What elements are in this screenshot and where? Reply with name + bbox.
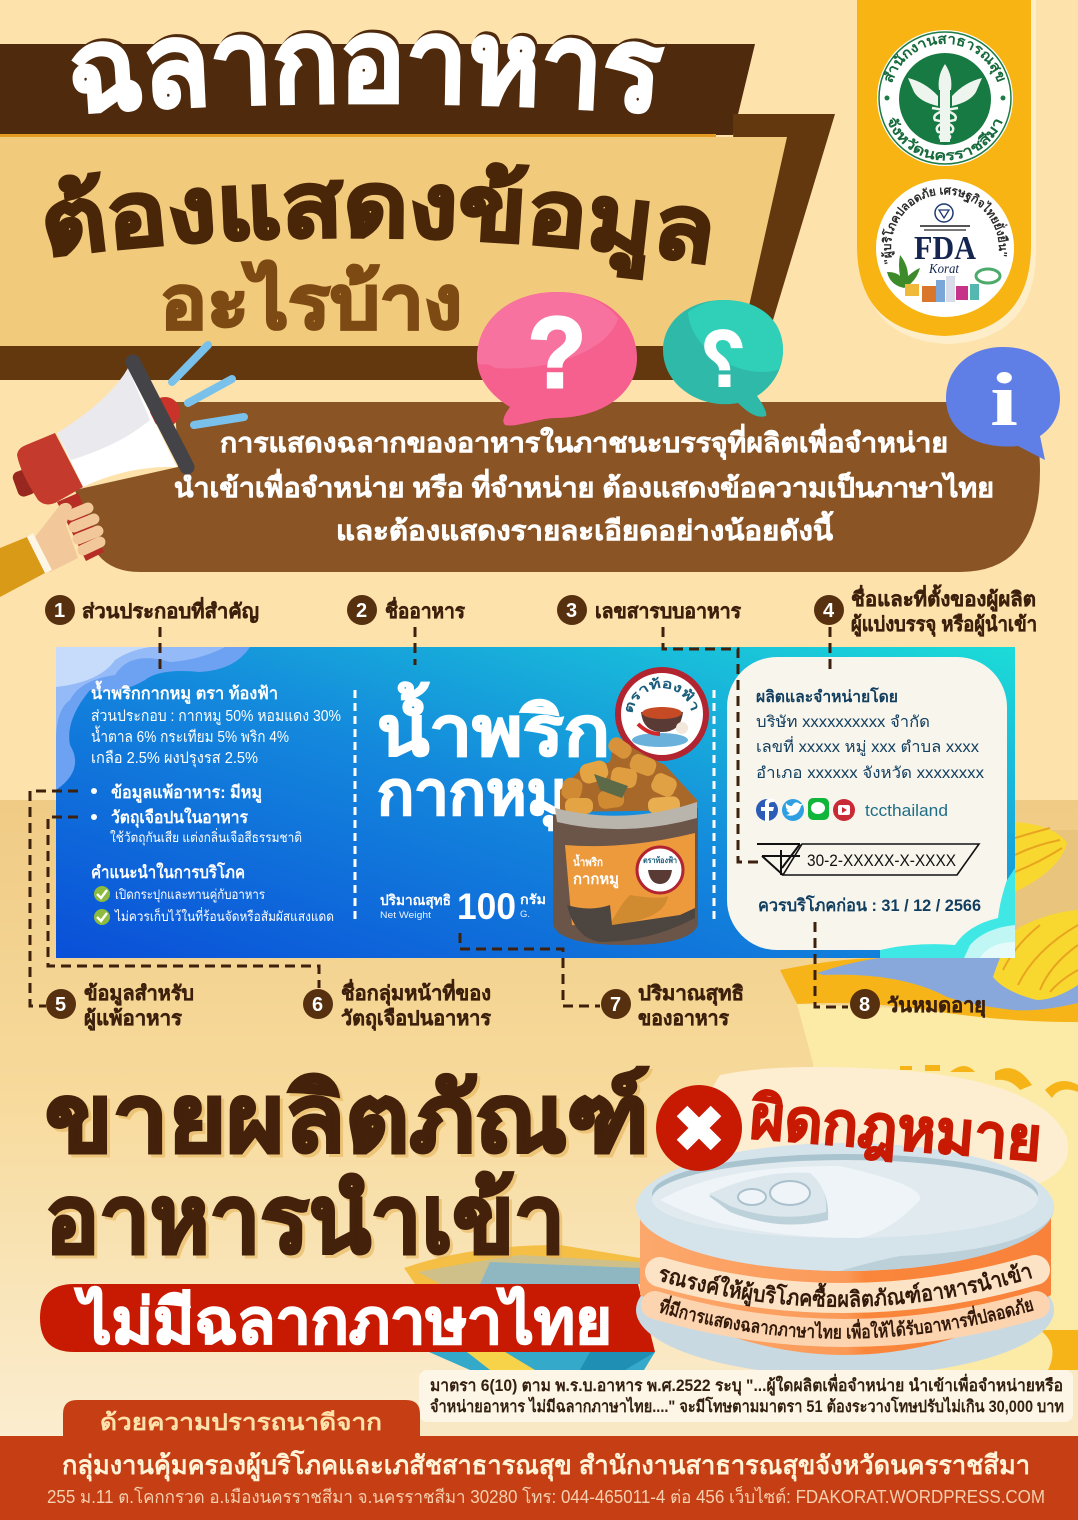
- footer: กลุ่มงานคุ้มครองผู้บริโภคและเภสัชสาธารณสุข สำนักงานสาธารณสุขจังหวัดนครราชสีมา: [62, 1449, 1030, 1482]
- net weight: กรัม: [520, 892, 546, 907]
- product name: กากหมู: [377, 760, 567, 831]
- logo: FDA Korat: "ผู้บริโภคปลอดภัย เศรษฐกิจไทยยั่งยืน": [880, 187, 1009, 264]
- icon: megaphone with hand: [0, 345, 244, 597]
- callout 5: allergy information: ผู้แพ้อาหาร: [84, 1007, 182, 1032]
- can label bands: ที่มีการแสดงฉลากภาษาไทย เพื่อให้ได้รับอาหารที่ปลอดภัย: [660, 1295, 1034, 1339]
- callout 7: net quantity: 7: [610, 994, 621, 1016]
- product jar: กากหมู: [573, 871, 619, 889]
- callout 1: ingredients: 1: [54, 600, 65, 622]
- callout 4: producer name and address: ผู้แบ่งบรรจุ หรือผู้นำเข้า: [851, 613, 1037, 638]
- manufacturer panel: บริษัท xxxxxxxxxx จำกัด: [756, 714, 930, 731]
- product jar: น้ำพริก: [573, 854, 603, 869]
- manufacturer panel: [727, 657, 1015, 958]
- net weight: 100: [457, 886, 516, 927]
- callout 6: additive function group: 6: [312, 994, 323, 1016]
- heading: อะไรบ้าง: อะไรบ้าง: [160, 259, 462, 344]
- icon: pink question bubble: ?: [528, 297, 586, 409]
- illegal text: ผิดกฎหมาย: [748, 1084, 1044, 1173]
- headline: selling imported food: ขายผลิตภัณฑ์: [45, 1066, 649, 1171]
- heading: ต้องแสดงข้อมูล: ต้องแสดงข้อมูล: [45, 162, 710, 280]
- title bands: [0, 44, 835, 380]
- ingredients panel: วัตถุเจือปนในอาหาร: [111, 807, 249, 828]
- callout 6: additive function group: [303, 978, 491, 1031]
- intro text: นำเข้าเพื่อจำหน่าย หรือ ที่จำหน่าย ต้องแสดงข้อความเป็นภาษาไทย: [174, 468, 994, 503]
- can label bands: รณรงค์ให้ผู้บริโภคซื้อผลิตภัณฑ์อาหารนำเข้า: [660, 1262, 1032, 1308]
- intro text: การแสดงฉลากของอาหารในภาชนะบรรจุที่ผลิตเพื่อจำหน่าย: [220, 423, 948, 460]
- ingredients panel: น้ำตาล 6% กระเทียม 5% พริก 4%: [91, 725, 289, 746]
- ingredients panel: เปิดกระปุกและทานคู่กับอาหาร: [115, 887, 265, 903]
- logo: provincial public health office: จังหวัดนครราชสีมา: [888, 117, 1003, 161]
- logo: provincial public health office: สำนักงานสาธารณสุข: [884, 35, 1005, 82]
- callout 3: food serial number: [557, 595, 741, 625]
- intro text: [174, 423, 994, 546]
- callout 6: additive function group: วัตถุเจือปนอาหาร: [341, 1007, 491, 1031]
- manufacturer panel: ควรบริโภคก่อน : 31 / 12 / 2566: [758, 895, 981, 915]
- can label bands: [641, 1255, 1050, 1347]
- illegal badge: [656, 1084, 1044, 1173]
- pull tab: [709, 1173, 828, 1224]
- headline: selling imported food: อาหารนำเข้า: [45, 1167, 565, 1272]
- brown intro panel: [75, 402, 1040, 572]
- callout 8: expiry date: วันหมดอายุ: [887, 995, 986, 1018]
- footer tab: ด้วยความปรารถนาดีจาก: [100, 1409, 382, 1435]
- tray decoration: [404, 1245, 655, 1370]
- brand badge: ตราท้องฟ้า: [626, 676, 698, 712]
- net weight: Net Weight: [380, 910, 431, 921]
- icon: teal question bubble: [663, 300, 783, 417]
- social icons: [756, 798, 948, 821]
- ingredients panel: ข้อมูลแพ้อาหาร: มีหมู: [111, 782, 262, 804]
- ingredients panel: ไม่ควรเก็บไว้ในที่ร้อนจัดหรือสัมผัสแสงแดด: [114, 907, 334, 924]
- callout 1: ingredients: ส่วนประกอบที่สำคัญ: [82, 596, 259, 623]
- callout 4: producer name and address: ชื่อและที่ตั้งของผู้ผลิต: [851, 584, 1036, 613]
- net weight: ปริมาณสุทธิ: [380, 892, 451, 909]
- icon: blue info bubble: [946, 347, 1060, 460]
- callout 5: allergy information: ข้อมูลสำหรับ: [84, 982, 194, 1007]
- food serial number mark: 30-2-XXXXX-X-XXXX: [807, 851, 956, 870]
- callout 6: additive function group: ชื่อกลุ่มหน้าที่ของ: [341, 978, 491, 1006]
- icon: blue info bubble: i: [990, 358, 1018, 442]
- logo: FDA Korat: FDA: [914, 230, 976, 267]
- ingredients panel: ใช้วัตถุกันเสีย แต่งกลิ่นเจือสีธรรมชาติ: [110, 828, 302, 846]
- social icons: tccthailand: [865, 801, 948, 820]
- callout 3: food serial number: เลขสารบบอาหาร: [595, 601, 741, 623]
- callout 2: food name: [347, 595, 465, 625]
- callout 4: producer name and address: [814, 584, 1037, 638]
- logo: provincial public health office: [877, 30, 1013, 166]
- product jar: [553, 735, 698, 945]
- icon: teal question bubble: ?: [701, 314, 745, 403]
- title: ฉลากอาหาร: ฉลากอาหาร: [71, 30, 667, 114]
- intro text: และต้องแสดงรายละเอียดอย่างน้อยดังนี้: [336, 510, 834, 546]
- headline: selling imported food: [45, 1066, 649, 1272]
- callout 2: food name: ชื่ออาหาร: [385, 596, 465, 623]
- callout 7: net quantity: ของอาหาร: [638, 1008, 729, 1030]
- callout 8: expiry date: [850, 989, 986, 1019]
- ingredients panel: ส่วนประกอบ : กากหมู 50% หอมแดง 30%: [91, 708, 341, 726]
- manufacturer panel: ผลิตและจำหน่ายโดย: [756, 686, 898, 706]
- callout 7: net quantity: [601, 983, 744, 1030]
- callout 7: net quantity: ปริมาณสุทธิ: [638, 983, 744, 1006]
- product name: [377, 681, 610, 831]
- callout 8: expiry date: 8: [859, 994, 870, 1016]
- net weight: G.: [520, 909, 530, 920]
- logo: FDA Korat: [876, 179, 1014, 317]
- icon: pink question bubble: [477, 292, 637, 426]
- logo: FDA Korat: Korat: [928, 262, 960, 277]
- callout 4: producer name and address: 4: [823, 600, 835, 622]
- callout 5: allergy information: 5: [55, 994, 66, 1016]
- chip decorations: [900, 822, 1078, 1370]
- tin can illustration: [636, 1143, 1054, 1370]
- law note box: [419, 1370, 1073, 1422]
- dashed connector lines: [30, 627, 848, 1007]
- callout 1: ingredients: [45, 595, 259, 625]
- product name: น้ำพริก: [377, 681, 610, 770]
- law note box: มาตรา 6(10) ตาม พ.ร.บ.อาหาร พ.ศ.2522 ระบุ "...ผู้ใดผลิตเพื่อจำหน่าย นำเข้าเพื่อจำหน่ายหรือ: [430, 1373, 1063, 1397]
- ingredients panel: [91, 680, 341, 925]
- ingredients panel: คำแนะนำในการบริโภค: [91, 862, 245, 882]
- callout 5: allergy information: [46, 982, 194, 1032]
- callout 3: food serial number: 3: [566, 600, 577, 622]
- red band: no Thai label: ไม่มีฉลากภาษาไทย: [74, 1286, 612, 1357]
- food serial number mark: [757, 844, 979, 875]
- brand badge: [615, 667, 709, 761]
- callout 2: food name: 2: [356, 600, 367, 622]
- ribbon with logos: [857, 0, 1036, 344]
- product jar: ตราท้องฟ้า: [643, 855, 677, 865]
- footer: [0, 1436, 1078, 1520]
- manufacturer panel: อำเภอ xxxxxx จังหวัด xxxxxxxx: [756, 765, 984, 782]
- ingredients panel: น้ำพริกกากหมู ตรา ท้องฟ้า: [91, 680, 278, 705]
- ingredients panel: เกลือ 2.5% ผงปรุงรส 2.5%: [91, 749, 258, 768]
- cream blob behind illegal badge: [705, 1067, 1068, 1190]
- product label card: [56, 647, 1015, 958]
- manufacturer panel: เลขที่ xxxxx หมู่ xxx ตำบล xxxx: [756, 736, 979, 757]
- footer: 255 ม.11 ต.โคกกรวด อ.เมืองนครราชสีมา จ.นครราชสีมา 30280 โทร: 044-465011-4 ต่อ 456 เว็บไซต์: FDAKORAT.WORDPRESS.COM: [47, 1485, 1045, 1507]
- net weight: [380, 886, 546, 927]
- footer tab: [63, 1400, 420, 1436]
